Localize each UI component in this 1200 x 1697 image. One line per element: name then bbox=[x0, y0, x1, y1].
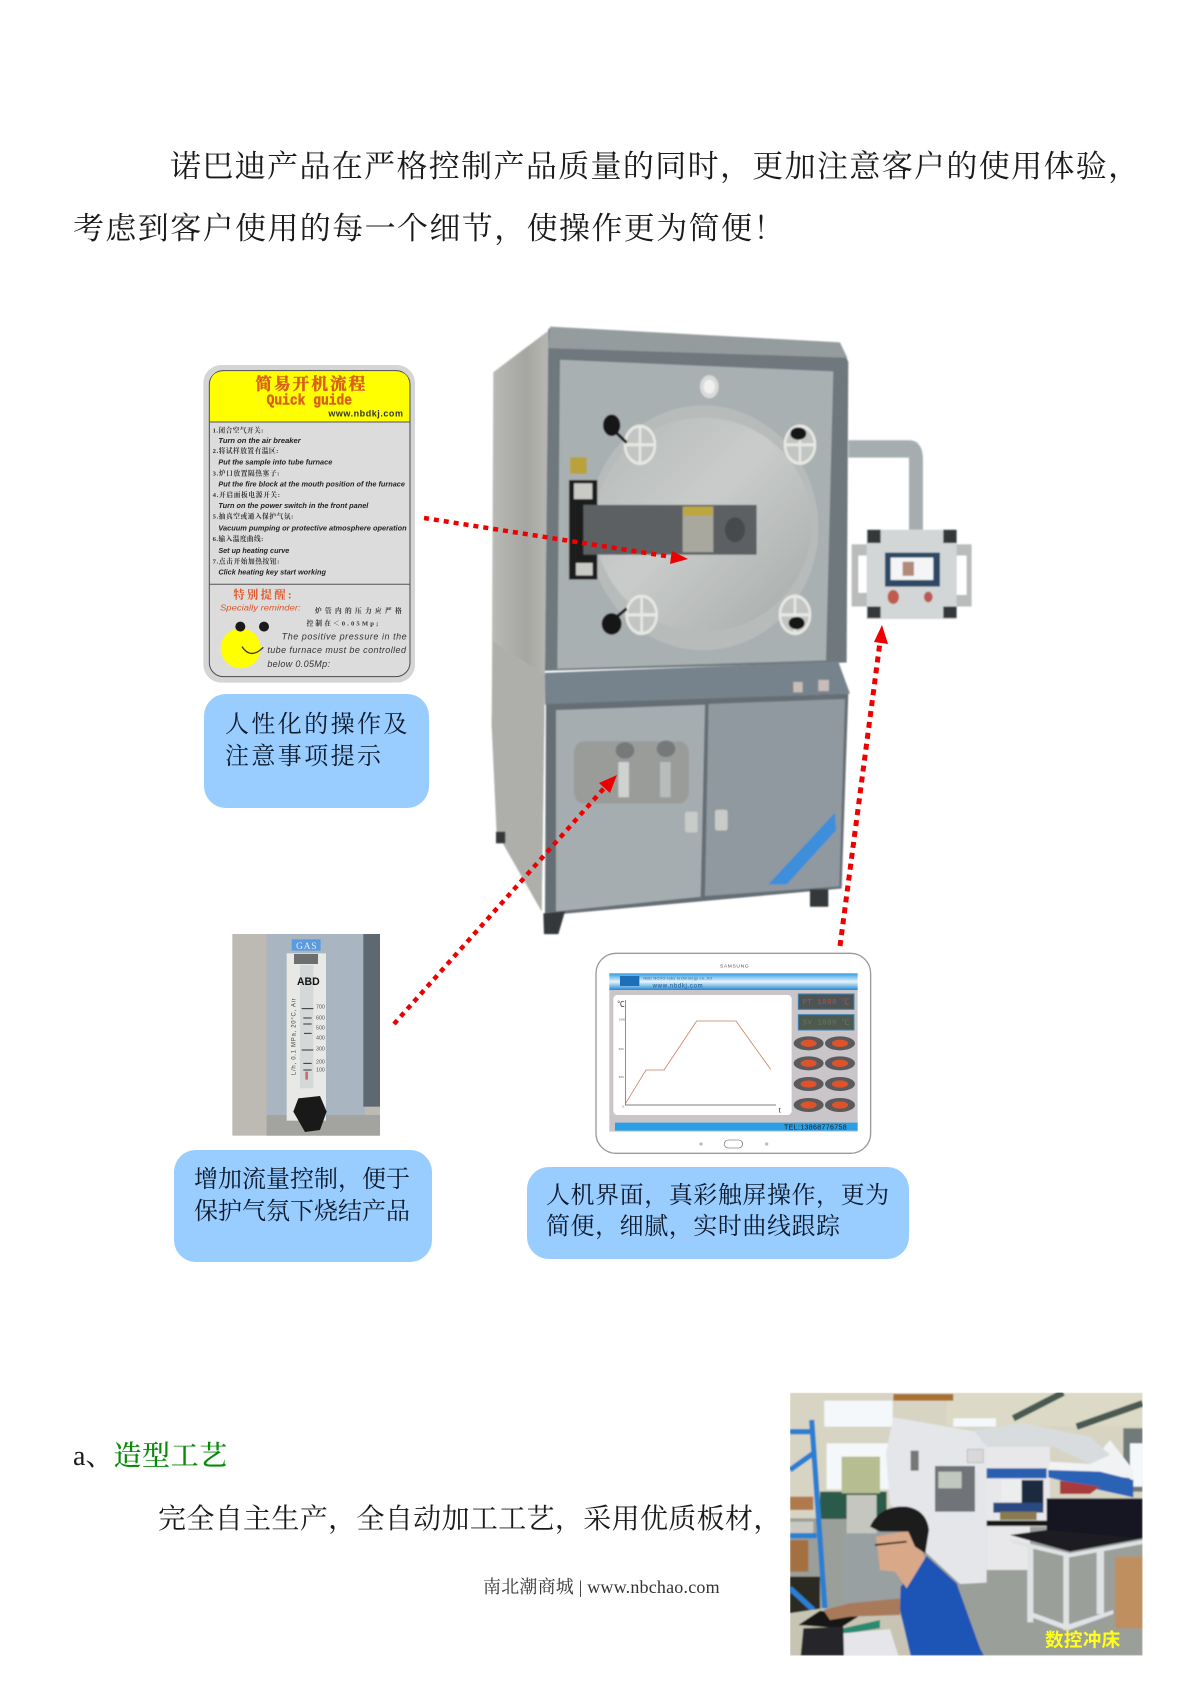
punch tables bbox=[1010, 1498, 1143, 1552]
CNC machine body bbox=[886, 1417, 1050, 1584]
guide reminder: below 0.05Mp: bbox=[267, 659, 330, 669]
guide steps: Set up heating curve bbox=[218, 548, 289, 555]
furnace upper frame bbox=[545, 329, 848, 671]
warning sticker bbox=[570, 457, 587, 474]
guide steps: Click heating key start working bbox=[218, 569, 327, 576]
temperature curve chart: t bbox=[779, 1105, 782, 1115]
blue rack bbox=[790, 1420, 825, 1610]
temperature readouts: SV 1000 ℃ bbox=[803, 1019, 850, 1028]
door clamp wheels bbox=[625, 426, 815, 633]
furnace side panel bbox=[492, 331, 548, 911]
operator bbox=[823, 1507, 984, 1656]
shelves bbox=[790, 1497, 820, 1613]
workshop floor bbox=[790, 1518, 1143, 1656]
tablet touch screen bbox=[596, 953, 871, 1153]
red arrow: flow gauge to window bbox=[394, 775, 617, 1024]
guide steps: 6.输入温度曲线: bbox=[213, 534, 263, 543]
intro paragraph: 诺巴迪产品在严格控制产品质量的同时，更加注意客户的使用体验， bbox=[170, 149, 1140, 184]
red arrow: touch screen to control box bbox=[840, 625, 888, 946]
blue logo strip bbox=[768, 813, 836, 884]
flowmeter scale tube: 300 bbox=[316, 1047, 325, 1053]
flowmeter scale tube: 700 bbox=[316, 1005, 325, 1011]
guide reminder: tube furnace must be controlled bbox=[267, 645, 407, 655]
temperature readouts bbox=[798, 994, 854, 1030]
guide steps: 2.将试样放置有温区: bbox=[213, 446, 278, 455]
quick guide card bbox=[203, 365, 415, 683]
guide steps: 4.开启面板电源开关: bbox=[213, 490, 280, 499]
guide steps: Turn on the power switch in the front panel bbox=[218, 503, 369, 510]
flowmeter scale tube bbox=[287, 953, 326, 1121]
callout: flow control bbox=[174, 1150, 432, 1262]
door hinge and arm bbox=[569, 480, 757, 580]
guide steps: Turn on the air breaker bbox=[218, 438, 302, 445]
guide steps: 7.点击开始加热按钮: bbox=[213, 556, 279, 565]
guide reminder: The positive pressure in the bbox=[282, 632, 407, 642]
footer source line: 南北潮商城 | www.nbchao.com bbox=[483, 1576, 720, 1597]
temperature curve chart: 0 bbox=[622, 1104, 624, 1108]
guide steps: 1.闭合空气开关: bbox=[213, 425, 263, 434]
callout: operation tips: 人性化的操作及 bbox=[225, 711, 410, 738]
flowmeter scale tube: L/h, 0.1 MPa, 20°C, Air bbox=[291, 998, 297, 1075]
touch control box bbox=[852, 530, 972, 619]
flowmeter scale tube: ABD bbox=[297, 976, 320, 988]
pressure gauge bbox=[700, 375, 719, 398]
guide yellow header: 简易开机流程 bbox=[255, 373, 366, 393]
callout: operation tips: 注意事项提示 bbox=[225, 743, 383, 770]
workshop photo bbox=[790, 1393, 1143, 1656]
flowmeter knob bbox=[293, 1096, 327, 1132]
wooden crate bbox=[1115, 1557, 1143, 1628]
guide reminder: 特别提醒: bbox=[233, 587, 292, 601]
GAS label: GAS bbox=[296, 941, 317, 952]
screen header logo: www.nbdkj.com bbox=[652, 984, 703, 990]
door locks bbox=[685, 810, 728, 833]
section heading: a、造型工艺 bbox=[73, 1440, 228, 1472]
guide reminder: Specially reminder: bbox=[220, 602, 301, 612]
guide steps: 5.抽真空或通入保护气氛: bbox=[213, 512, 293, 521]
control buttons bbox=[794, 1036, 855, 1112]
screen footer bar bbox=[615, 1123, 858, 1132]
screen header logo bbox=[620, 976, 712, 990]
photo caption: 数控冲床 bbox=[1045, 1629, 1121, 1650]
control band bbox=[545, 662, 850, 705]
guide yellow header bbox=[209, 371, 410, 422]
flowmeter scale tube: 100 bbox=[316, 1067, 325, 1073]
intro paragraph bbox=[73, 149, 1140, 246]
white table frame bbox=[1008, 1538, 1143, 1631]
callout: touch interface: 人机界面，真彩触屏操作，更为 bbox=[546, 1182, 890, 1209]
callout: operation tips bbox=[204, 694, 429, 808]
furnace product image bbox=[492, 327, 972, 934]
desk bbox=[790, 1608, 913, 1656]
flowmeter photo bbox=[232, 934, 380, 1136]
callout: touch interface bbox=[527, 1167, 909, 1259]
guide yellow header: www.nbdkj.com bbox=[327, 408, 403, 418]
guide steps: Put the sample into tube furnace bbox=[218, 459, 332, 466]
guide steps: 3.炉口放置隔热塞子: bbox=[213, 468, 279, 477]
right cabinet door bbox=[705, 699, 845, 896]
flowmeter scale tube: 400 bbox=[316, 1035, 325, 1041]
callout: flow control: 保护气氛下烧结产品 bbox=[194, 1198, 410, 1225]
screen header logo: NBD NOVO-labs technology co.,ltd bbox=[643, 976, 712, 980]
tablet touch screen: SAMSUNG bbox=[720, 963, 749, 969]
guide yellow header: Quick guide bbox=[267, 394, 352, 410]
turret hood bbox=[973, 1423, 1133, 1497]
guide reminder: 控制在＜0.05Mp; bbox=[307, 619, 378, 628]
vacuum door bbox=[588, 405, 818, 650]
flowmeter scale tube: 600 bbox=[316, 1015, 325, 1021]
press machine bbox=[840, 1456, 890, 1602]
guide reminder bbox=[220, 587, 407, 669]
red arrow: guide to door bbox=[424, 518, 688, 564]
flowmeter scale tube: 200 bbox=[316, 1059, 325, 1065]
connecting pipe bbox=[848, 449, 916, 530]
temperature curve chart: 600 bbox=[619, 1047, 624, 1051]
callout: touch interface: 简便，细腻，实时曲线跟踪 bbox=[546, 1213, 841, 1240]
left cabinet door bbox=[556, 705, 705, 911]
cabinet frame bbox=[545, 694, 848, 915]
upper front panel bbox=[557, 360, 833, 669]
black knobs bbox=[603, 416, 805, 633]
callout: flow control: 增加流量控制，便于 bbox=[194, 1166, 410, 1193]
guide steps: Vacuum pumping or protective atmosphere operation bbox=[218, 525, 407, 532]
temperature curve chart: 1000 bbox=[619, 1018, 626, 1022]
temperature curve chart: ℃ bbox=[617, 1000, 625, 1009]
lower side panel bbox=[492, 642, 545, 911]
screen footer bar: TEL:13868776758 bbox=[784, 1125, 847, 1132]
guide steps bbox=[213, 425, 407, 576]
intro paragraph: 考虑到客户使用的每一个细节，使操作更为简便！ bbox=[73, 211, 786, 246]
flowmeter scale tube: 500 bbox=[316, 1025, 325, 1031]
furnace feet bbox=[496, 832, 828, 934]
temperature readouts: PT 1000 ℃ bbox=[803, 998, 850, 1007]
guide steps: Put the fire block at the mouth position of the furnace bbox=[218, 482, 405, 489]
guide reminder: 炉管内的压力应严格 bbox=[314, 606, 402, 615]
GAS label bbox=[292, 939, 321, 952]
flowmeter window bbox=[574, 740, 689, 803]
temperature curve chart bbox=[613, 995, 792, 1115]
page canvas bbox=[74, 150, 1143, 1656]
smiley face icon bbox=[221, 622, 269, 668]
section paragraph: 完全自主生产，全自动加工工艺，采用优质板材， bbox=[158, 1503, 782, 1535]
tablet home button bbox=[699, 1140, 768, 1148]
temperature curve chart: 300 bbox=[619, 1075, 624, 1079]
